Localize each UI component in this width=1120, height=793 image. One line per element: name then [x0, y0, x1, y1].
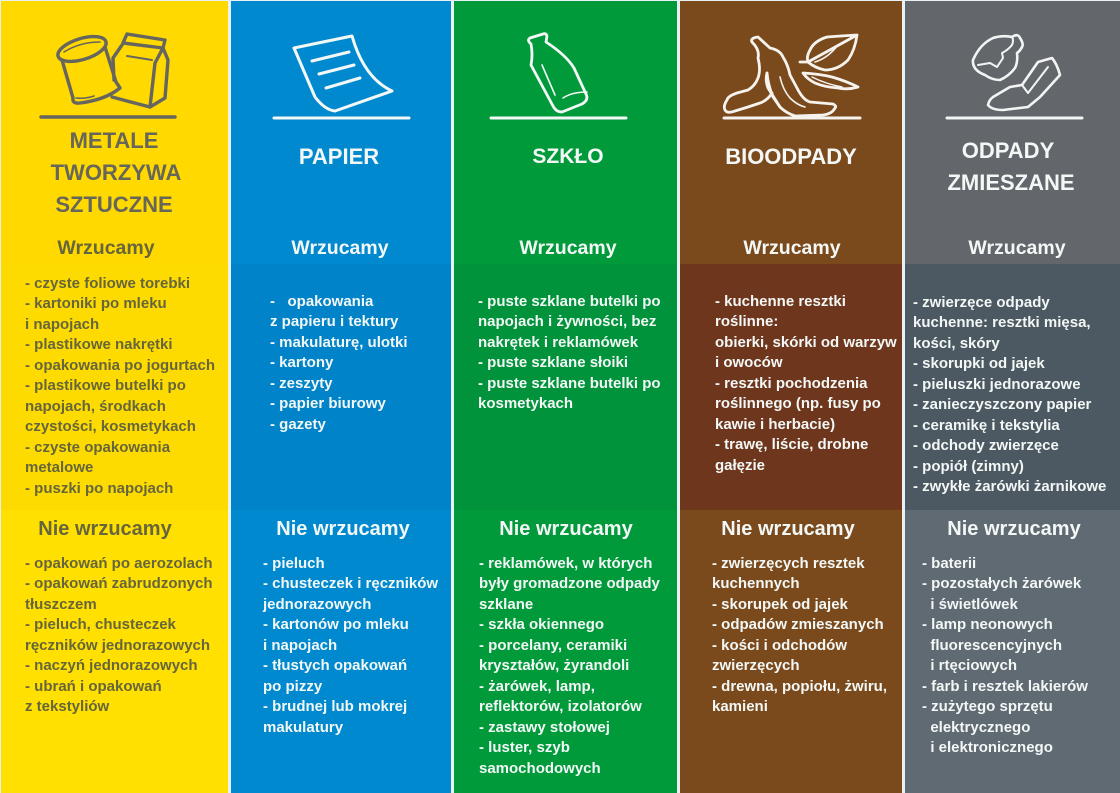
panel: odpady zmieszane — [905, 1, 1120, 793]
title: PAPIER — [299, 144, 379, 169]
heading: wrzucamy: Wrzucamy — [57, 237, 155, 259]
panel: metale i tworzywa sztuczne: SZTUCZNE — [55, 192, 173, 217]
list: nie wrzucamy: - baterii - pozostałych żarówek i świetlówek - lamp neonowych fluorescencyjnych i rtęciowych - farb i resztek lakierów - zużytego sprzętu elektrycznego i elektronicznego — [922, 555, 1088, 756]
heading: nie wrzucamy: Nie wrzucamy — [276, 518, 410, 540]
panel: bioodpady — [680, 1, 902, 793]
list: wrzucamy: - czyste foliowe torebki - kartoniki po mleku i napojach - plastikowe nakrętki - opakowania po jogurtach - plastikowe butelki po napojach, środkach czystości, kosmetykach - czyste opakowania metalowe - puszki po napojach — [25, 275, 215, 497]
panel: odpady zmieszane: ZMIESZANE — [947, 170, 1075, 195]
list: nie wrzucamy: - reklamówek, w których były gromadzone odpady szklane - szkła okiennego - porcelany, ceramiki kryształów, żyrandoli - żarówek, lamp, reflektorów, izolatorów - zastawy stołowej - luster, szyb samochodowych — [479, 555, 660, 777]
list: nie wrzucamy: - zwierzęcych resztek kuchennych - skorupek od jajek - odpadów zmieszanych - kości i odchodów zwierzęcych - drewna, popiołu, żwiru, kamieni — [712, 555, 887, 715]
list: nie wrzucamy: - pieluch - chusteczek i ręczników jednorazowych - kartonów po mleku i napojach - tłustych opakowań po pizzy - brudnej lub mokrej makulatury — [263, 555, 438, 736]
title: SZKŁO — [532, 145, 604, 168]
list: wrzucamy: - opakowania z papieru i tektury - makulaturę, ulotki - kartony - zeszyty - papier biurowy - gazety — [270, 293, 408, 433]
panel: metale i tworzywa sztuczne: TWORZYWA — [51, 160, 181, 185]
icon: banana peel and leaves — [722, 34, 862, 120]
heading: nie wrzucamy: Nie wrzucamy — [947, 518, 1081, 540]
panel: metale i tworzywa sztuczne — [1, 1, 228, 793]
icon: egg shell and shoe — [946, 34, 1084, 120]
list: wrzucamy: - zwierzęce odpady kuchenne: resztki mięsa, kości, skóry - skorupki od jajek - pieluszki jednorazowe - zanieczyszczony papier - ceramikę i tekstylia - odchody zwierzęce - popiół (zimny) - zwykłe żarówki żarnikowe — [913, 294, 1106, 495]
heading: nie wrzucamy: Nie wrzucamy — [721, 518, 855, 540]
list: nie wrzucamy: - opakowań po aerozolach - opakowań zabrudzonych tłuszczem - pieluch, chusteczek ręczników jednorazowych - naczyń jednorazowych - ubrań i opakowań z tekstyliów — [25, 555, 213, 715]
heading: nie wrzucamy: Nie wrzucamy — [499, 518, 633, 540]
heading: nie wrzucamy: Nie wrzucamy — [38, 518, 172, 540]
heading: wrzucamy: Wrzucamy — [743, 237, 841, 259]
list: wrzucamy: - puste szklane butelki po napojach i żywności, bez nakrętek i reklamówek - puste szklane słoiki - puste szklane butelki po kosmetykach — [478, 293, 661, 412]
title: BIOODPADY — [725, 144, 857, 169]
heading: wrzucamy: Wrzucamy — [291, 237, 389, 259]
icon: can and carton — [39, 32, 177, 119]
title: ODPADY — [962, 138, 1054, 163]
icon: bottle — [490, 32, 628, 120]
title: METALE — [70, 128, 158, 153]
heading: wrzucamy: Wrzucamy — [968, 237, 1066, 259]
heading: wrzucamy: Wrzucamy — [519, 237, 617, 259]
icon: paper sheet — [272, 34, 410, 120]
panel: papier — [231, 1, 451, 793]
panel: szkło — [454, 1, 677, 793]
list: wrzucamy: - kuchenne resztki roślinne: obierki, skórki od warzyw i owoców - resztki pochodzenia roślinnego (np. fusy po kawie i herbacie) - trawę, liście, drobne gałęzie — [715, 293, 897, 474]
